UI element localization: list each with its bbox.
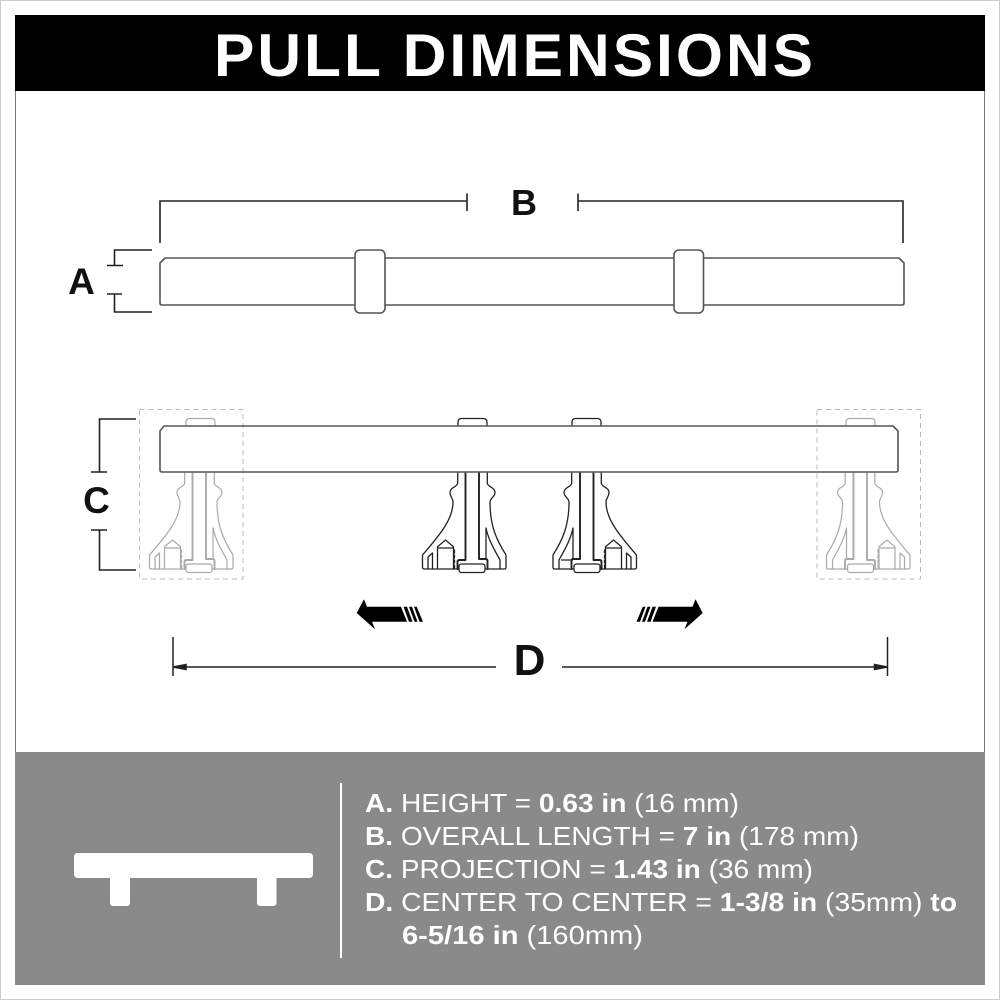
dashed ghost box right xyxy=(817,410,920,579)
dimension A bracket xyxy=(107,250,152,312)
spec B: B. OVERALL LENGTH = 7 in (178 mm) xyxy=(365,821,859,851)
arrow left xyxy=(357,599,423,629)
side view handle bar xyxy=(160,426,898,472)
ghost foot right xyxy=(826,418,910,572)
center foot right xyxy=(553,418,636,572)
spec A: A. HEIGHT = 0.63 in (16 mm) xyxy=(365,788,739,818)
label A: A xyxy=(68,261,95,302)
arrow right xyxy=(636,599,703,629)
label B: B xyxy=(511,182,537,223)
divider xyxy=(340,783,342,958)
dimension D line xyxy=(173,637,888,676)
ghost foot left xyxy=(150,418,233,572)
icon: pull silhouette xyxy=(74,853,313,906)
center foot left xyxy=(422,418,506,572)
label D: D xyxy=(514,636,545,685)
label C: C xyxy=(83,480,110,521)
dashed ghost box left xyxy=(140,410,243,579)
specs panel xyxy=(15,752,985,985)
title banner xyxy=(15,15,985,91)
dimension B bracket xyxy=(160,194,903,243)
spec D: D. CENTER TO CENTER = 1-3/8 in (35mm) to xyxy=(365,887,957,917)
top view of pull xyxy=(160,250,904,313)
title: PULL DIMENSIONS xyxy=(214,22,816,89)
dimension C bracket xyxy=(91,419,136,570)
spec D continued: 6-5/16 in (160mm) xyxy=(402,920,643,950)
spec C: C. PROJECTION = 1.43 in (36 mm) xyxy=(365,854,813,884)
